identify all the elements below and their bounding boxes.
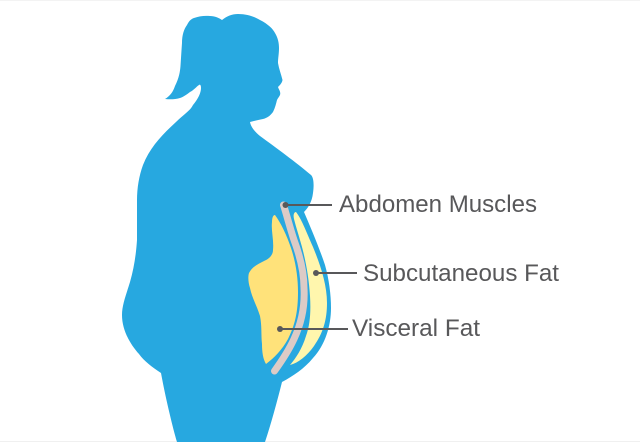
pointer: visceral fat — [277, 326, 348, 332]
silhouette: woman in profile — [122, 14, 331, 442]
label text: subcutaneous fat: Subcutaneous Fat — [363, 260, 559, 287]
pointer: subcutaneous fat — [313, 270, 357, 276]
pointer: abdomen muscles — [282, 202, 332, 208]
label text: visceral fat: Visceral Fat — [352, 315, 480, 342]
label: abdomen muscles — [282, 191, 537, 218]
subcutaneous fat — [290, 212, 327, 365]
abdomen muscles — [274, 205, 304, 371]
label: subcutaneous fat — [313, 260, 559, 287]
visceral fat — [248, 215, 298, 364]
label: visceral fat — [277, 315, 480, 342]
label text: abdomen muscles: Abdomen Muscles — [339, 191, 537, 218]
